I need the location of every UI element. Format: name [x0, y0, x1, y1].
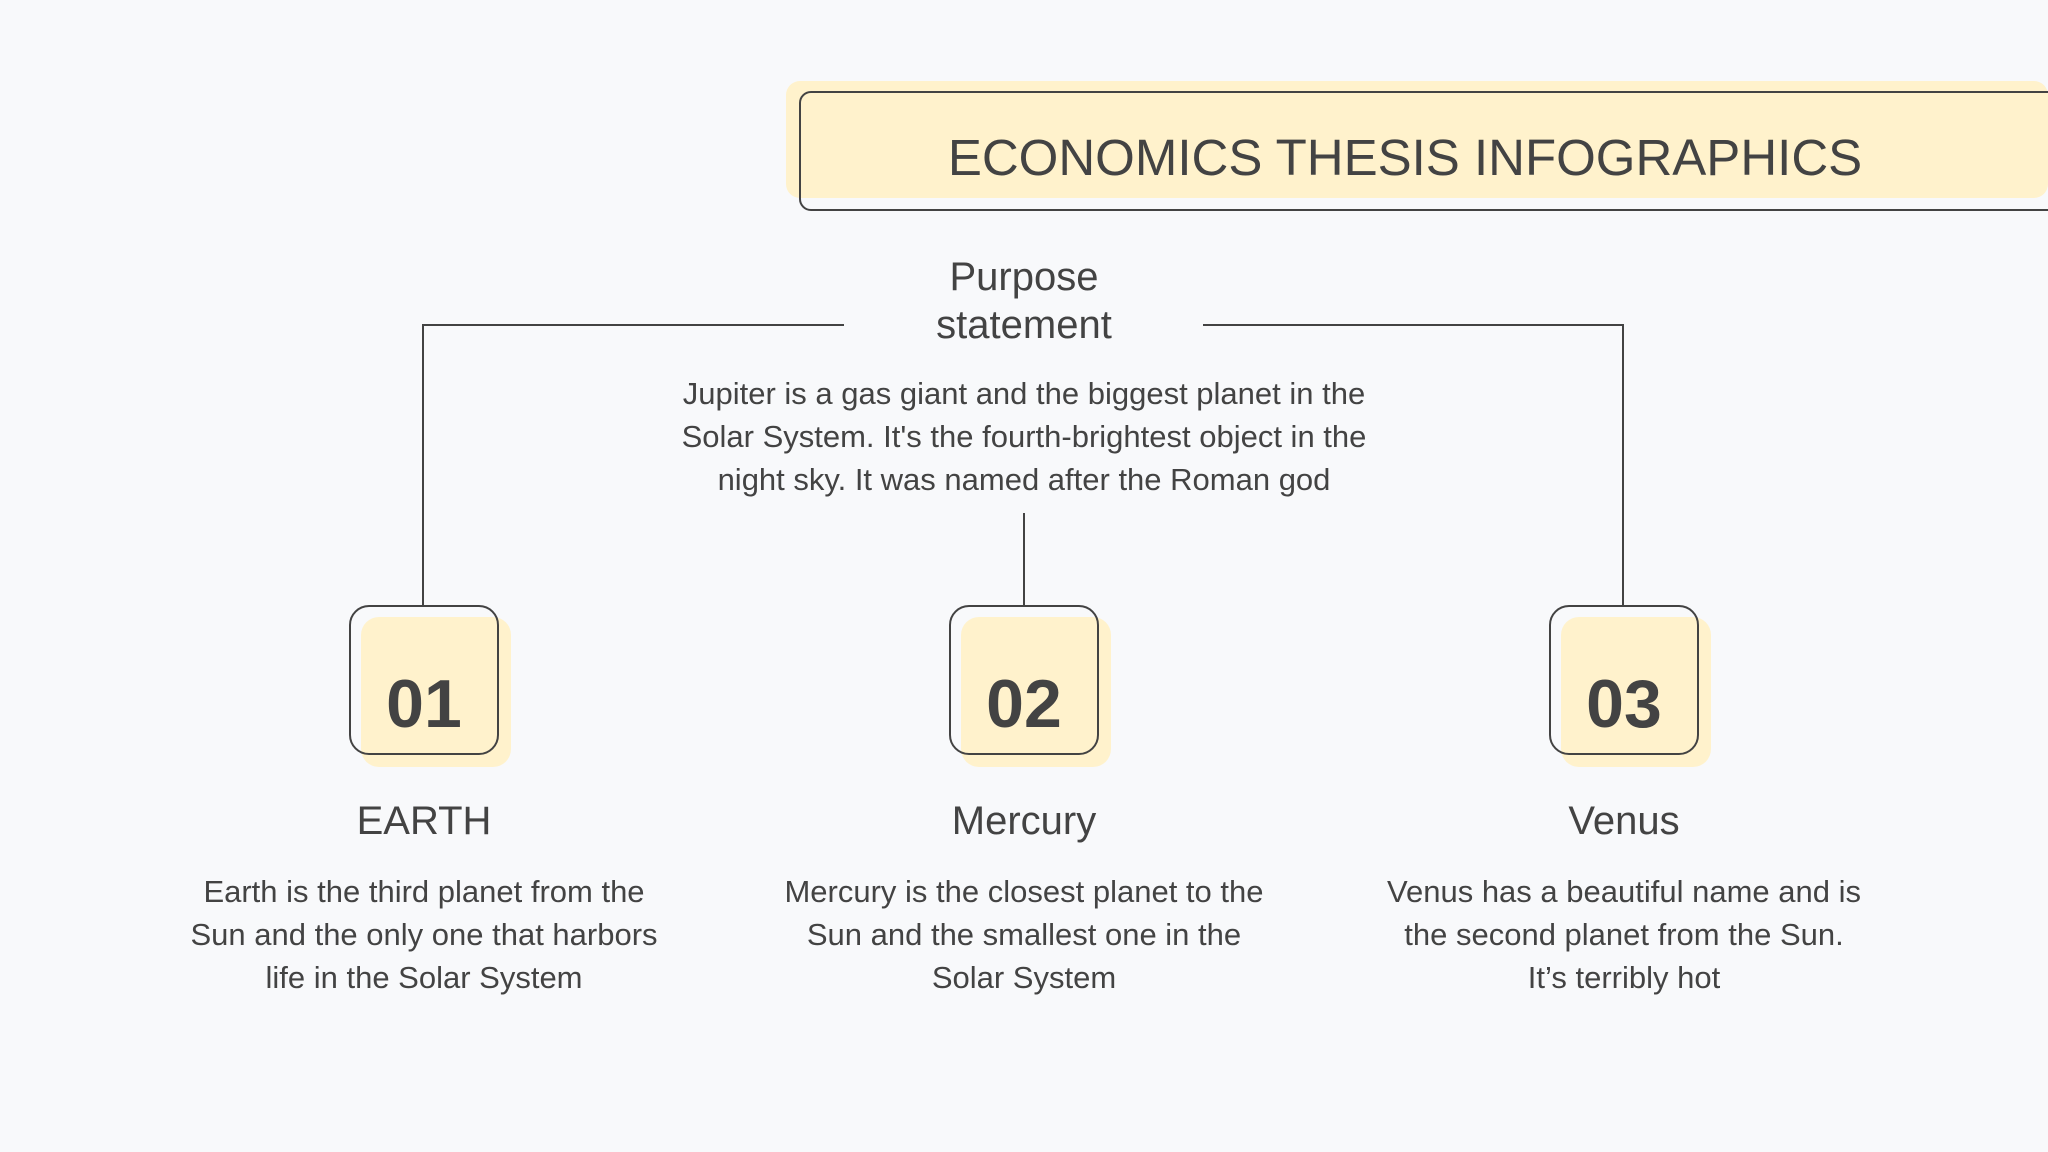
text: Mercury: Solar System: [932, 960, 1116, 995]
text: Venus: the second planet from the Sun.: [1404, 917, 1844, 952]
purpose statement text: Jupiter is a gas giant and the biggest planet in the: [683, 376, 1365, 411]
heading: EARTH: EARTH: [357, 799, 491, 843]
text: Mercury: Sun and the smallest one in the: [807, 917, 1241, 952]
text: Venus: Venus has a beautiful name and is: [1387, 874, 1861, 909]
text: Mercury: Mercury is the closest planet to the: [784, 874, 1264, 909]
box 02: [949, 605, 1111, 767]
purpose statement text: night sky. It was named after the Roman god: [718, 462, 1330, 497]
heading: Mercury: Mercury: [952, 799, 1096, 843]
text: Earth: [190, 874, 658, 995]
purpose statement heading: Purpose: [950, 255, 1098, 299]
box 01: 01: [386, 666, 462, 742]
title text: ECONOMICS THESIS INFOGRAPHICS: [948, 129, 1862, 186]
purpose statement text: Solar System. It's the fourth-brightest object in the: [682, 419, 1366, 454]
box 03: [1549, 605, 1711, 767]
heading: Venus: Venus: [1568, 799, 1680, 843]
text: Venus: [1387, 874, 1861, 995]
purpose statement text: [682, 376, 1366, 497]
purpose statement heading: [936, 255, 1112, 347]
purpose statement heading: statement: [936, 303, 1112, 347]
box 02: 02: [986, 666, 1062, 742]
text: Earth: Sun and the only one that harbors: [190, 917, 658, 952]
text: Earth: Earth is the third planet from the: [203, 874, 645, 909]
text: Venus: It’s terribly hot: [1528, 960, 1720, 995]
text: Mercury: [784, 874, 1264, 995]
box 03: 03: [1586, 666, 1662, 742]
text: Earth: life in the Solar System: [265, 960, 583, 995]
box 01: [349, 605, 511, 767]
title banner: [786, 81, 2048, 211]
